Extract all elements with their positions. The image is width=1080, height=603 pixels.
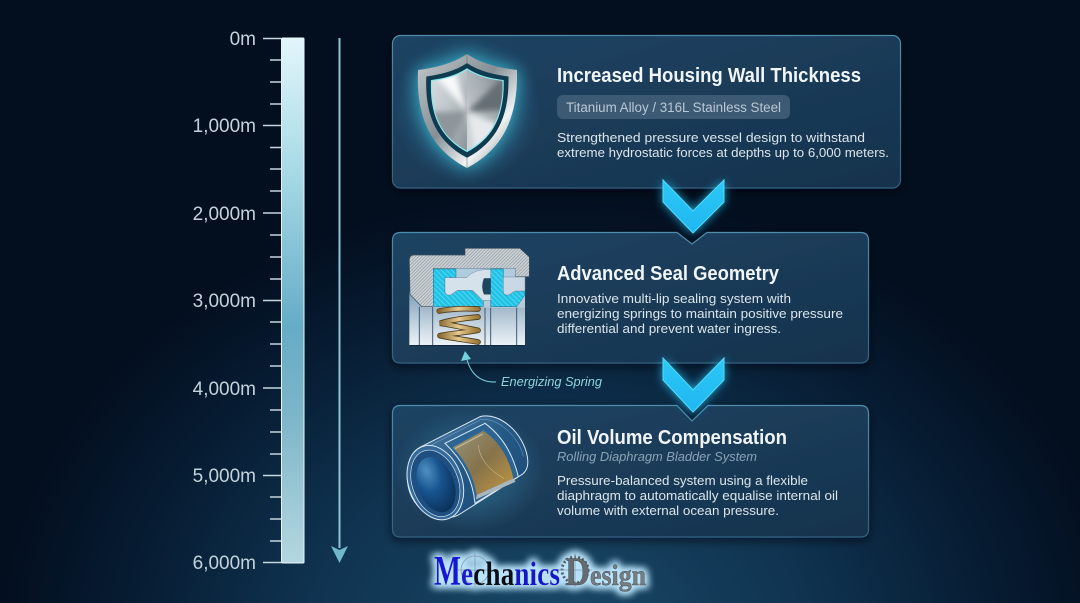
depth labels: 1,000m <box>193 116 256 137</box>
depth scale <box>193 29 304 574</box>
description <box>557 130 889 160</box>
depth labels: 5,000m <box>193 466 256 487</box>
description: energizing springs to maintain positive pressure <box>557 306 843 321</box>
text: seal geometry <box>557 263 843 336</box>
description: differential and prevent water ingress. <box>557 321 781 336</box>
tick marks <box>263 38 281 562</box>
heading: Advanced Seal Geometry <box>557 263 780 285</box>
depth bar <box>282 38 304 563</box>
logo: Mechanics Design: esign <box>590 559 646 592</box>
panel: oil volume compensation <box>392 406 868 537</box>
logo word Design: D <box>565 549 590 594</box>
logo word Mechanics: M <box>434 549 461 595</box>
descent arrow <box>331 38 348 563</box>
logo mark rings <box>458 553 592 587</box>
material tag <box>557 95 790 119</box>
panel: housing wall thickness <box>392 36 900 188</box>
material tag: Titanium Alloy / 316L Stainless Steel <box>566 100 781 115</box>
description: Pressure-balanced system using a flexible <box>557 473 808 488</box>
description: volume with external ocean pressure. <box>557 503 779 518</box>
logo: Mechanics Design <box>434 549 646 595</box>
description <box>557 473 838 518</box>
arrow: chevron 2 <box>663 358 724 412</box>
annotation: energizing spring <box>461 351 602 389</box>
annotation: energizing spring: Energizing Spring <box>501 375 602 389</box>
icon: oil compensator cylinder <box>397 416 528 528</box>
depth labels: 3,000m <box>193 291 256 312</box>
depth labels: 4,000m <box>193 379 256 400</box>
icon: seal cross-section <box>409 248 529 346</box>
subtitle: Rolling Diaphragm Bladder System <box>557 450 757 464</box>
depth labels: 6,000m <box>193 553 256 574</box>
heading: Increased Housing Wall Thickness <box>557 65 861 87</box>
icon: shield <box>418 54 517 168</box>
arrow: chevron 1 <box>663 180 724 233</box>
heading: Oil Volume Compensation <box>557 427 787 449</box>
depth labels: 0m <box>230 29 256 50</box>
depth labels: 2,000m <box>193 204 256 225</box>
description <box>557 291 843 336</box>
description: diaphragm to automatically equalise internal oil <box>557 488 838 503</box>
description: Strengthened pressure vessel design to withstand <box>557 130 865 145</box>
panel: seal geometry <box>392 232 868 363</box>
description: extreme hydrostatic forces at depths up to 6,000 meters. <box>557 145 889 160</box>
logo: Mechanics Design: echanics <box>461 556 560 593</box>
description: Innovative multi-lip sealing system with <box>557 291 791 306</box>
depth labels <box>193 29 256 574</box>
